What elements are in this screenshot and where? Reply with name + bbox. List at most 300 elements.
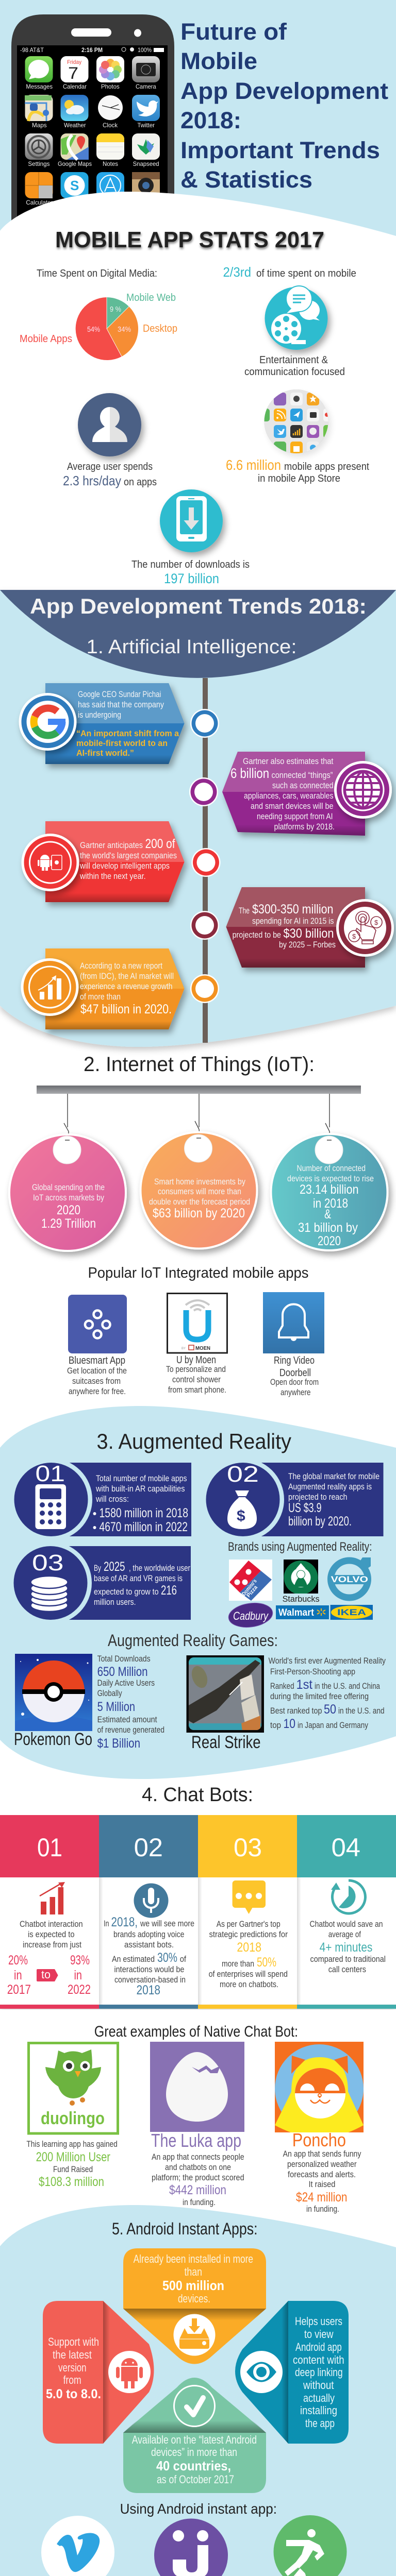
title: Future of [180,19,287,45]
panel: idc revenue card: of more than [80,992,121,1002]
panel: forbes spending card [226,887,394,968]
text: gartner chatbot spending [209,1919,288,1989]
header bowl: app development trends: App Development Trends 2018: [30,594,367,618]
icon: entertainment and communication [265,286,328,350]
text: entertainment and communication focused [244,354,345,378]
panel: available in countries: devices” in more than [151,2446,237,2459]
background: white stats panel with curved top [0,192,396,592]
icon: download tray [173,2314,216,2355]
heading: native chat bots: Great examples of Native Chat Bot: [94,2023,298,2040]
text: poncho: It raised [308,2179,335,2189]
panel: ar stat 02: Augmented reality apps is [288,1482,372,1492]
panel: idc revenue card: (from IDC), the AI market will [80,971,174,981]
title: Important Trends [180,137,380,163]
icon: rising bars [40,1882,65,1914]
icon: smartphone home screen: S [70,178,79,193]
panel: ar stat 01: with built-in AR capabilities [95,1484,185,1494]
panel: available in countries [123,2378,266,2493]
timeline node: orange [190,974,219,1003]
text: gartner chatbot spending: 2018 [237,1940,261,1955]
text: gartner chatbot spending: 50% [257,1955,276,1970]
panel: idc revenue card [21,948,185,1029]
panel: ar stat 02: US $3.9 [288,1501,322,1515]
panel: google card: AI-first world.” [76,748,134,758]
panel: gartner things card: and smart devices will be [251,801,333,811]
icon: money bag [227,1490,257,1529]
text: luka app: and chatbots on one [165,2162,231,2172]
app: bluesmart: anywhere for free. [69,1386,126,1396]
app: bluesmart: Get location of the [67,1366,127,1376]
panel: idc revenue card: $47 billion in 2020. [80,1002,172,1016]
panel: chatbot column headers and frame: 01 [37,1833,62,1862]
panel: ar stat 01: 01 [35,1461,65,1486]
icon: user [78,393,141,456]
text: chatbot interaction: 20% [8,1953,28,1968]
panel: android version support: version [58,2361,87,2374]
app icon: pokemon go: Pokemon Go [14,1730,92,1749]
hanging tag: smart home investments [140,1094,257,1249]
logo: starbucks: Starbucks [283,1594,320,1604]
icon: grid of mobile apps [258,389,336,455]
app: bluesmart: suitcases from [72,1376,121,1386]
heading: android instant apps: 5. Android Instant Apps: [112,2219,258,2238]
background: trends light blue panel [0,590,396,1047]
background: hero light blue [0,0,396,242]
panel: ar stat 02: 02 [227,1462,259,1487]
text: average user spends [63,461,157,488]
hanging tag: global spending: IoT across markets by [33,1193,104,1202]
text: real strike stats: Best ranked top [270,1706,322,1716]
text: voice assistant bots: conversation-based in [114,1975,186,1985]
text: two thirds of time: of time spent on mobile [256,268,356,279]
panel: installed on devices: than [185,2265,202,2278]
panel: deep linking: the app [305,2417,335,2430]
text: real strike stats: 1st [296,1677,312,1692]
panel: ar stat 03: By [94,1563,101,1573]
panel: deep linking: content with [293,2353,344,2366]
text: voice assistant bots: 2018 [136,1983,160,1997]
app: jet [141,2518,234,2576]
icon: android and apple [22,834,79,891]
hanging tag: connected devices: devices is expected to rise [287,1174,374,1183]
text: real strike stats: in Japan and Germany [298,1720,368,1730]
heading: ar games: Augmented Reality Games: [108,1631,278,1650]
text: time spent heading: Time Spent on Digital Media: [37,268,157,279]
text: real strike stats: 10 [284,1717,295,1731]
panel: installed on devices: Already been installed in more [134,2252,253,2265]
text: average user spends: 2.3 hrs/day [63,473,121,488]
panel: gartner intelligent apps card: will develop intelligent apps [79,861,170,871]
icon: smartphone home screen: Calculator [26,199,53,206]
icon: smartphone home screen [11,14,174,247]
text: real strike stats: in the U.S. and China [315,1681,380,1691]
hanging tag: connected devices: 31 billion by [298,1221,358,1235]
panel: gartner intelligent apps card: Gartner anticipates [80,840,143,850]
panel: installed on devices: 500 million [162,2278,224,2293]
panel: available in countries: Available on the “latest Android [132,2433,257,2446]
panel: google card: is undergoing [78,710,121,720]
logo: cadbury: Cadbury [233,1609,269,1622]
pie chart: time spent on digital media: Mobile Web [126,292,176,303]
logo: domino's [229,1560,272,1601]
panel: ar stat 02: The global market for mobile [288,1471,380,1481]
panel: ar stat 03 [9,1541,191,1624]
icon: google logo [19,693,76,751]
text: poncho: in funding. [306,2204,339,2214]
logo: starbucks [283,1560,320,1604]
panel: ar stat 01: will cross: [95,1494,129,1504]
icon: download to phone [160,489,223,552]
logo: volvo: VOLVO [331,1574,368,1584]
text: real strike stats: First-Person-Shooting app [270,1667,355,1676]
panel: deep linking: installing [300,2404,337,2417]
text: average user spends: Average user spends [67,461,153,472]
icon: hand with coins: $ [352,933,356,940]
app: bluesmart: Bluesmart App [69,1355,125,1366]
text: entertainment and communication focused: Entertainment & [259,354,328,366]
app: u by moen: control shower [172,1375,221,1384]
text: voice assistant bots: assistant bots. [124,1940,174,1950]
logo: ikea: IKEA [337,1607,366,1617]
panel: ar stat 01: Total number of mobile apps [96,1473,187,1483]
hanging tag: smart home investments: $63 billion by 2020 [153,1206,245,1221]
icon: eye [240,2351,283,2393]
icon: chat bubble [233,1880,266,1914]
text: duolingo stats [26,2139,118,2189]
text: poncho: Poncho [292,2129,346,2150]
text: gartner chatbot spending: more on chatbots. [220,1979,278,1989]
text: voice assistant bots: interactions would be [114,1964,185,1974]
panel: android version support: Support with [48,2335,99,2348]
text: chatbot interaction: in [74,1968,82,1982]
panel: ar stat 01: 1580 million in 2018 [99,1506,188,1520]
panel: gartner intelligent apps card: within the next year. [79,871,146,881]
logo: cadbury [227,1600,274,1630]
panel: ar stat 03: 2025 [104,1560,125,1574]
pie chart: time spent on digital media [20,292,177,360]
text: entertainment and communication focused: communication focused [244,366,345,378]
panel: ar stat 01: 4670 million in 2022 [99,1520,188,1534]
pie chart: time spent on digital media: 9 % [110,305,121,314]
panel: gartner things card: platforms by 2018. [274,822,335,832]
panel: ar stat 03: 216 [161,1583,177,1598]
text: chatbot saves time: call centers [328,1964,366,1974]
text: number of downloads: The number of downloads is [131,559,250,570]
app: vimeo [39,2516,121,2576]
title: 2018: [180,107,241,133]
panel: gartner things card: 6 billion [230,766,269,781]
title: Mobile [180,48,257,74]
panel: google card: “An important shift from a [76,728,179,738]
app: u by moen: To personalize and [166,1364,226,1374]
text: voice assistant bots: of [180,1954,186,1964]
logo: domino's: Domino's [241,1578,258,1597]
text: real strike stats: 50 [324,1702,336,1717]
text: chatbot interaction [7,1919,91,1997]
text: pokemon go stats: $1 Billion [97,1736,140,1751]
hanging tag: connected devices: & [324,1207,331,1222]
hanging tag: smart home investments: Smart home investments by [154,1177,245,1187]
text: 6.6 million apps: in mobile App Store [258,473,340,484]
text: chatbot interaction: Chatbot interaction [20,1919,83,1929]
logo: ikea [331,1605,373,1620]
icon: smartphone home screen: Google Maps [58,160,92,167]
panel: chatbot column headers and frame [0,1815,396,2009]
panel: ar stat 03: expected to grow to [94,1587,159,1597]
panel: google card: mobile-first world to an [76,738,168,748]
text: voice assistant bots: In [104,1919,109,1928]
title: App Development [180,78,388,104]
text: pokemon go stats: 5 Million [97,1700,135,1714]
panel: available in countries: as of October 2017 [157,2473,234,2486]
text: voice assistant bots: An estimated [112,1954,155,1964]
hanging tag: global spending: Global spending on the [32,1182,105,1192]
app: bluesmart [67,1295,127,1396]
icon: smartphone home screen: Weather [64,122,86,129]
text: real strike stats: top [270,1720,281,1730]
panel: deep linking: actually [303,2392,335,2404]
icon: smartphone home screen: 100% [138,46,152,54]
panel: google card [19,683,185,764]
panel: deep linking: to view [304,2328,334,2341]
hanging tag: connected devices: 2020 [318,1234,341,1248]
panel: gartner things card: such as connected [272,781,333,790]
text: pokemon go stats: Daily Active Users [97,1678,155,1688]
header bowl: app development trends [0,590,396,678]
panel: available in countries: 40 countries, [156,2458,231,2473]
app icon: real strike [187,1655,264,1752]
text: gartner chatbot spending: of enterprises will spend [209,1969,288,1979]
panel: idc revenue card: According to a new report [80,961,162,971]
text: real strike stats: Ranked [270,1681,294,1691]
panel: chatbot column headers and frame: 03 [234,1833,262,1862]
app: u by moen [166,1293,227,1395]
text: chatbot saves time: average of [328,1929,361,1939]
logo: duolingo [29,2043,118,2133]
icon: smartphone home screen: Settings [28,160,50,167]
panel: ar stat 03: million users. [94,1597,136,1607]
panel: gartner things card [222,752,392,836]
app: one football [264,2515,356,2576]
panel: forbes spending card: $30 billion [284,926,334,941]
text: number of downloads [131,559,250,586]
text: chatbot saves time: 4+ minutes [320,1940,372,1955]
hanging tag: global spending [9,1094,126,1251]
logo: volvo [328,1557,371,1598]
icon: timer [331,1880,365,1913]
header bowl: app development trends: 1. Artificial Intelligence: [87,636,297,658]
text: two thirds of time: 2/3rd [223,264,251,280]
icon: smartphone home screen: Maps [32,122,47,129]
panel: chatbot column headers and frame: 04 [332,1833,360,1862]
panel: idc revenue card: experience a revenue growth [80,981,172,991]
heading: popular iot apps: Popular IoT Integrated mobile apps [88,1265,308,1281]
heading: internet of things: 2. Internet of Things (IoT): [84,1053,315,1076]
panel: ar stat 02: billion by 2020. [288,1514,352,1529]
panel: chatbot column headers and frame: 02 [134,1833,163,1862]
text: poncho: An app that sends funny [283,2149,361,2159]
icon: smartphone home screen: Photos [101,83,120,90]
icon: money bag: $ [237,1507,245,1524]
text: luka app: The Luka app [151,2130,241,2151]
timeline node: red [192,848,221,877]
icon: growth chart [21,958,78,1016]
icon: voice microphone [134,1884,168,1918]
text: voice assistant bots: 30% [157,1951,177,1965]
panel: installed on devices [123,2248,266,2364]
text: voice assistant bots [104,1915,194,1997]
hanging bar [37,1086,361,1094]
hanging tag: smart home investments: consumers will more than [158,1187,241,1196]
panel: gartner things card: connected “things” [271,770,333,780]
icon: smartphone home screen: -98 AT&T [20,46,44,54]
pie chart: time spent on digital media: 54% [87,325,100,334]
panel: forbes spending card: The [239,906,250,916]
icon: smartphone home screen: 2:16 PM [81,46,103,54]
text: duolingo stats: This learning app has gained [26,2139,118,2149]
panel: gartner things card: appliances, cars, wearables [244,791,333,801]
text: gartner chatbot spending: As per Gartner's top [217,1919,280,1929]
app: u by moen: MOEN [195,1346,210,1351]
title [180,19,388,193]
panel: forbes spending card: spending for AI in 2015 is [252,916,334,926]
text: pokemon go stats: Estimated amount [97,1715,157,1724]
hanging tag: connected devices: Number of connected [297,1163,366,1173]
text: gartner chatbot spending: more than [222,1959,254,1969]
text: pokemon go stats: of revenue generated [97,1725,164,1735]
text: 6.6 million apps [226,457,369,484]
app icon: real strike: Real Strike [191,1733,261,1752]
text: real strike stats: during the limited free offering [270,1691,369,1701]
panel: gartner intelligent apps card: the world's largest companies [80,851,177,860]
text: 6.6 million apps: mobile apps present [284,461,369,472]
panel: ar stat 01 [10,1458,191,1540]
text: chatbot saves time [309,1919,386,1974]
hanging tag: connected devices [271,1094,388,1250]
background: augmented reality blue panel [0,1406,396,1779]
text: gartner chatbot spending: strategic predictions for [209,1929,288,1939]
panel: deep linking: Helps users [295,2315,342,2328]
text: chatbot interaction: 2022 [68,1982,91,1997]
app: u by moen: BY [182,1347,186,1350]
heading: mobile app stats: MOBILE APP STATS 2017 [55,227,324,252]
timeline node: blue [190,709,219,738]
hanging tag: smart home investments: double over the forecast period [149,1197,250,1207]
panel: forbes spending card: $300-350 million [252,902,333,917]
panel: ar stat 03: , the worldwide user [129,1563,190,1573]
app: u by moen: U by Moen [176,1354,216,1366]
heading: augmented reality: 3. Augmented Reality [97,1429,291,1453]
text: chatbot interaction: increase from just [23,1940,81,1950]
panel: ar stat 03: base of AR and VR games is [94,1573,183,1583]
hanging tag: global spending: 2020 [57,1203,80,1217]
text: 6.6 million apps: 6.6 million [226,457,281,473]
panel: android version support: 5.0 to 8.0. [46,2387,101,2401]
panel: deep linking: without [303,2379,334,2392]
panel: forbes spending card: by 2025 – Forbes [279,940,336,950]
text: two thirds of time [223,264,356,280]
pie chart: time spent on digital media: 34% [118,325,131,334]
text: chatbot interaction: in [14,1968,22,1982]
icon: smartphone home screen: Snapseed [133,160,159,167]
panel: gartner intelligent apps card [22,821,185,902]
heading: chat bots: 4. Chat Bots: [142,1784,253,1806]
panel: deep linking [235,2301,349,2444]
panel: forbes spending card: projected to be [233,930,281,940]
text: pokemon go stats: Total Downloads [97,1654,151,1664]
app: ring video doorbell: Open door from [270,1377,319,1387]
panel: android version support [43,2301,154,2444]
heading: using android instant app: Using Android instant app: [120,2501,277,2517]
panel: ar stat 02: projected to reach [288,1492,348,1502]
text: voice assistant bots: we will see more [140,1919,194,1928]
icon: smartphone home screen: Notes [103,160,118,167]
hanging tag: connected devices: in 2018 [313,1196,348,1211]
text: poncho: $24 million [296,2190,348,2205]
text: poncho: forecasts and alerts. [288,2170,356,2179]
hanging tag: connected devices: 23.14 billion [300,1182,359,1197]
icon: smartphone home screen: 7 [68,64,78,82]
text: chatbot interaction: 93% [70,1953,90,1968]
text: chatbot interaction: is expected to [28,1929,74,1939]
text: average user spends: on apps [124,477,157,488]
icon: coin stack [31,1576,68,1612]
icon: smartphone home screen: Camera [136,83,156,90]
pie chart: time spent on digital media: Mobile Apps [20,333,72,345]
text: duolingo stats: $108.3 million [39,2175,104,2189]
icon: calculator [35,1484,66,1529]
logo: domino's: Pizza [245,1584,259,1599]
icon: check mark [174,2385,214,2427]
panel: deep linking: deep linking [295,2366,343,2379]
timeline node: maroon [190,911,219,940]
text: luka app: An app that connects people [152,2152,244,2162]
text: pokemon go stats: 650 Million [97,1665,148,1679]
app: ring video doorbell [263,1292,324,1397]
text: duolingo stats: Fund Raised [53,2164,93,2174]
panel: android version support: the latest [53,2348,92,2361]
timeline spine [203,678,208,1043]
logo: luka egg [150,2042,244,2132]
text: pokemon go stats [97,1654,164,1751]
timeline node: purple [189,777,218,806]
icon: android robot [108,2351,151,2393]
panel: deep linking: Android app [295,2341,342,2353]
text: pokemon go stats: Globally [97,1688,122,1698]
text: voice assistant bots: brands adopting voice [113,1929,185,1939]
text: chatbot interaction: 2017 [7,1982,31,1997]
panel: gartner intelligent apps card: 200 of [145,837,175,851]
panel: google card: Google CEO Sundar Pichai [78,689,161,699]
panel: gartner things card: needing support from AI [257,811,333,821]
title: & Statistics [180,166,312,193]
text: luka app: $442 million [169,2183,226,2197]
icon: hand with coins [336,899,394,957]
panel: ar stat 02 [202,1458,384,1540]
app: ring video doorbell: Doorbell [279,1367,311,1379]
app: ring video doorbell: anywhere [280,1387,310,1397]
logo: walmart [276,1605,329,1619]
text: luka app: platform; the product scored [152,2173,244,2182]
text: real strike stats: in the U.S. and [338,1706,385,1716]
pie chart: time spent on digital media: Desktop [143,323,177,334]
icon: hand with coins: $ [374,919,378,926]
text: number of downloads: 197 billion [164,571,219,586]
text: real strike stats [269,1656,386,1731]
text: voice assistant bots: 2018, [111,1915,138,1929]
panel: google card: has said that the company [78,700,164,709]
logo: poncho cat [275,2042,364,2138]
